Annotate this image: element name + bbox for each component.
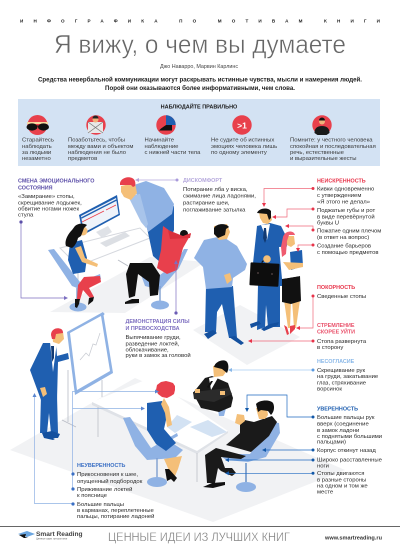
arrow: emotional state to woman <box>19 220 68 300</box>
text: submission: Сведенные стопы <box>317 294 366 300</box>
isometric floor under the meeting table <box>10 378 345 522</box>
text: insincerity gestures: «Я этого не делал» <box>317 200 371 206</box>
tip 1 text <box>22 136 54 162</box>
text: insincerity gestures: Поджатые губы и рот <box>317 208 376 214</box>
meeting table <box>92 378 228 482</box>
text: uncertainty <box>77 472 154 520</box>
text: disagreement <box>317 368 379 392</box>
trousers <box>257 285 280 330</box>
text: discomfort <box>183 187 256 213</box>
hand <box>263 255 271 263</box>
red hair <box>156 381 175 398</box>
chair <box>123 417 183 460</box>
text: change of emotional state: стула <box>18 212 34 218</box>
arm <box>283 262 303 270</box>
confident man in chair <box>203 400 280 492</box>
man with crossed arms <box>193 360 233 416</box>
tip 2 text: предметов <box>68 156 97 162</box>
arrows: confidence <box>225 395 314 475</box>
text: foot turned: Стопа развернута <box>317 339 367 345</box>
face <box>213 365 226 377</box>
text: confidence: на одном и том же <box>317 483 368 489</box>
text: insincerity gestures: Пожатие одним плечом <box>317 229 381 235</box>
shirt <box>194 236 247 289</box>
arrow: discomfort to head <box>135 178 178 182</box>
head <box>214 224 230 240</box>
text: discomfort: Потирание лба у виска, <box>183 187 248 193</box>
red hair <box>120 177 135 187</box>
chair <box>139 249 188 310</box>
face <box>121 183 137 200</box>
book <box>290 250 303 270</box>
face <box>259 210 272 224</box>
heading: change of emotional state: СМЕНА ЭМОЦИОНАЛЬНОГО <box>18 178 94 184</box>
tip 2 text: между вами и объектом <box>68 144 133 150</box>
tip 3 text: наблюдение <box>144 144 179 150</box>
logo tagline: Ценные идеи лучших книг <box>36 537 68 541</box>
arm <box>75 246 98 267</box>
text: insincerity gestures: с помощью предметов <box>317 250 379 256</box>
man leaning back in chair <box>125 226 191 310</box>
footer logo <box>18 531 83 541</box>
red shirt <box>157 226 191 274</box>
woman with book <box>279 231 303 335</box>
tip 5 text: и выразительные жесты <box>290 156 356 162</box>
hair <box>281 231 295 257</box>
text: confidence: месте <box>317 489 334 495</box>
authors: Джо Наварро, Марвин Карлинс <box>160 64 238 70</box>
legs <box>77 276 101 300</box>
tip 5 text: Помните: у честного человека <box>290 138 373 144</box>
legs <box>284 300 300 328</box>
chair <box>48 249 101 312</box>
text: confidence: Стопы двигаются <box>317 471 364 477</box>
shoe <box>125 299 139 304</box>
icon: greater than one: >1 <box>237 120 247 130</box>
tip 2 text: Позаботьтесь, чтобы <box>68 138 125 144</box>
text: discomfort: сжимание лица ладонями, <box>183 194 256 200</box>
text: insincerity gestures: Кивки одновременно <box>317 186 375 192</box>
man with blue shirt from behind <box>194 224 247 345</box>
tip 1 text: Старайтесь <box>22 136 54 144</box>
tip 4 text: эмоциях человека лишь <box>211 144 277 150</box>
heading: dominance <box>126 319 190 332</box>
text: change of emotional state: «Замирание» стопы, <box>18 194 75 200</box>
hand <box>40 387 47 397</box>
head <box>78 226 88 236</box>
trousers <box>205 286 237 338</box>
black shoes <box>165 469 177 482</box>
chair <box>218 408 226 416</box>
text: uncertainty: к пояснице <box>77 493 108 499</box>
hair <box>214 224 229 238</box>
text: insincerity gestures: (в ответ на вопрос) <box>317 235 369 241</box>
face <box>52 332 64 344</box>
text: uncertainty: опущенный подбородок <box>77 478 143 485</box>
text: dominance: руки в замок за головой <box>126 352 191 359</box>
text: discomfort: поглаживание затылка <box>183 207 246 213</box>
heading: confidence: УВЕРЕННОСТЬ <box>317 407 358 413</box>
arrows: submission and leaving <box>248 294 314 343</box>
heading: disagreement: НЕСОГЛАСИЕ <box>317 359 355 365</box>
heading: submission: ПОКОРНОСТЬ <box>317 285 355 291</box>
shoe <box>203 482 225 488</box>
text: foot turned: в сторону <box>317 345 343 351</box>
shoes <box>204 330 244 345</box>
arm <box>168 230 191 239</box>
text: change of emotional state: обвитие ногами ножек <box>18 206 79 212</box>
tip 3 text: с нижней части тела <box>144 149 201 156</box>
icon: calm man in suit <box>312 115 332 135</box>
icon: person behind barrier <box>86 115 106 135</box>
text: disagreement: глаз, стряхивание <box>317 380 367 386</box>
tip 1 text: за людьми <box>22 150 51 156</box>
heading: change of emotional state: СОСТОЯНИЯ <box>18 186 53 192</box>
tip 1 text: незаметно <box>22 156 51 162</box>
arm <box>161 398 172 427</box>
shoes <box>75 297 94 308</box>
title: Я вижу, о чем вы думаете <box>54 29 346 59</box>
text: dominance: облокачивание, <box>126 348 169 354</box>
crossed arms <box>193 388 232 402</box>
text: insincerity gestures: с утверждением <box>317 193 361 199</box>
hair <box>214 360 228 373</box>
face <box>286 236 295 247</box>
man in suit at the board <box>30 328 69 440</box>
tip 1 text: наблюдать <box>22 144 52 150</box>
footer website: www.smartreading.ru <box>324 536 383 542</box>
text: confidence: Корпус откинут назад <box>317 448 376 454</box>
icon: spy glasses <box>26 115 49 135</box>
header line: ИНФОГРАФИКА ПО МОТИВАМ КНИГИ <box>20 18 380 24</box>
text: confidence <box>317 415 383 495</box>
text: dominance: разведение локтей, <box>126 340 180 348</box>
tip 5 text: речь, естественные <box>290 150 345 156</box>
hair <box>257 209 271 220</box>
hair <box>66 224 87 248</box>
dress <box>68 240 87 274</box>
heading: uncertainty: НЕУВЕРЕННОСТЬ <box>77 463 126 469</box>
lead paragraph: Средства невербальной коммуникации могут раскрывать истинные чувства, мысли и намерения людей. <box>38 76 362 84</box>
tip 4 text: Не судите об истинных <box>211 138 274 144</box>
text: disagreement: ворсинок <box>317 386 342 392</box>
tip 4 text <box>211 138 277 156</box>
shirt and tie <box>261 224 270 240</box>
woman in blue dress at table <box>123 381 183 487</box>
hair <box>256 400 274 415</box>
tip 5 text <box>290 138 376 162</box>
hands <box>195 389 225 395</box>
heading: desire to leave <box>317 323 355 336</box>
logo name: Smart Reading <box>36 531 83 538</box>
arm <box>128 194 148 228</box>
icon: leg and shoe <box>156 115 176 135</box>
heading: change of emotional state <box>18 178 94 192</box>
text: confidence: ноги <box>317 464 329 470</box>
footer rule <box>0 525 400 528</box>
text: confidence: в разные стороны <box>317 477 366 483</box>
tip 3 text <box>144 136 201 156</box>
text: uncertainty: пальцы, потирание ладоней <box>77 513 154 520</box>
jacket <box>30 343 69 400</box>
text: uncertainty: в карманах, переплетенные <box>77 508 154 514</box>
jacket <box>251 223 287 286</box>
dress <box>147 401 176 451</box>
text: confidence: с поднятыми большими <box>317 434 382 440</box>
board marker dot <box>102 313 104 315</box>
arrow: dominance <box>174 260 178 315</box>
red hair <box>51 328 63 339</box>
jacket <box>226 416 277 452</box>
arrows: uncertainty <box>32 390 159 506</box>
text: dominance: Выпячивание груди, <box>126 335 181 341</box>
heading: dominance: И ПРЕВОСХОДСТВА <box>126 326 180 332</box>
trousers <box>205 448 246 483</box>
shirt <box>50 342 57 372</box>
arrow: disagreement <box>228 368 314 372</box>
black trousers <box>126 263 160 298</box>
arrows: insincerity <box>262 187 314 252</box>
tip 2 text <box>68 138 133 162</box>
text: disagreement: Скрещивание рук <box>317 368 365 374</box>
heading: insincerity: НЕИСКРЕННОСТЬ <box>317 178 366 184</box>
icon: greater than one <box>232 115 252 135</box>
text: confidence: вверх (соединение <box>317 422 369 428</box>
text: discomfort: растирание шеи, <box>183 200 230 206</box>
suit <box>193 376 233 412</box>
isometric floor under the computer scene <box>50 257 205 313</box>
tip 3 text: Начинайте <box>144 136 175 144</box>
computer desk <box>60 226 150 286</box>
chair <box>222 422 280 462</box>
panel: observe correctly <box>18 99 380 166</box>
tip 4 text: по одному элементу <box>211 150 267 156</box>
top <box>279 246 300 279</box>
tip 5 text: спокойная и последовательная <box>290 143 376 150</box>
heading: discomfort: ДИСКОМФОРТ <box>183 178 223 184</box>
text: dominance <box>126 335 191 359</box>
bare legs <box>164 456 182 476</box>
text: confidence: Широко расставленные <box>317 458 383 464</box>
skirt <box>282 276 301 304</box>
tip 2 text: наблюдения не было <box>68 150 127 156</box>
face <box>256 408 268 419</box>
heading: desire to leave: СТРЕМЛЕНИЕ <box>317 323 355 329</box>
man in suit with briefcase <box>249 209 287 331</box>
monitor <box>79 195 120 235</box>
legs <box>147 206 174 262</box>
hand, thumbs up <box>235 414 245 425</box>
text: insincerity gestures: в виде перевёрнутой <box>317 214 375 220</box>
standing bent man <box>120 177 174 262</box>
text: confidence: пальцами) <box>317 440 346 446</box>
lead paragraph <box>38 76 362 92</box>
shoes <box>42 431 60 440</box>
isometric floor under the standing people <box>193 305 300 365</box>
torso <box>134 181 174 232</box>
text: uncertainty: Большие пальцы <box>77 502 124 508</box>
heading: desire to leave: СКОРЕЕ УЙТИ <box>317 328 355 336</box>
text: insincerity gestures <box>317 186 381 256</box>
red shoes <box>284 325 295 335</box>
presentation board <box>62 312 113 427</box>
text: confidence: в замок ладони <box>317 428 359 434</box>
text: uncertainty: Прижимание локтей <box>77 486 132 493</box>
trousers <box>40 395 58 433</box>
text: insincerity gestures: Создание барьеров <box>317 244 371 250</box>
text: confidence: Большие пальцы рук <box>317 415 375 421</box>
woman at computer <box>48 224 101 312</box>
text: change of emotional state: скрещивание лодыжек, <box>18 200 82 206</box>
shirt and tie <box>209 376 219 390</box>
text: disagreement: на груди, закатывание <box>317 374 379 380</box>
heading: dominance: ДЕМОНСТРАЦИЯ СИЛЫ <box>126 319 190 325</box>
shoes <box>250 321 279 331</box>
text: uncertainty: Прикосновения к шее, <box>77 472 138 478</box>
text: foot turned <box>317 339 367 351</box>
text: change of emotional state <box>18 194 82 218</box>
panel heading: НАБЛЮДАЙТЕ ПРАВИЛЬНО <box>161 102 238 110</box>
text: insincerity gestures: буквы U <box>317 221 339 227</box>
briefcase <box>249 261 280 287</box>
head <box>180 230 188 238</box>
footer slogan: ЦЕННЫЕ ИДЕИ ИЗ ЛУЧШИХ КНИГ <box>108 532 291 544</box>
lead paragraph: Порой они оказываются более информативными, чем слова. <box>105 85 295 92</box>
hand <box>224 273 232 284</box>
